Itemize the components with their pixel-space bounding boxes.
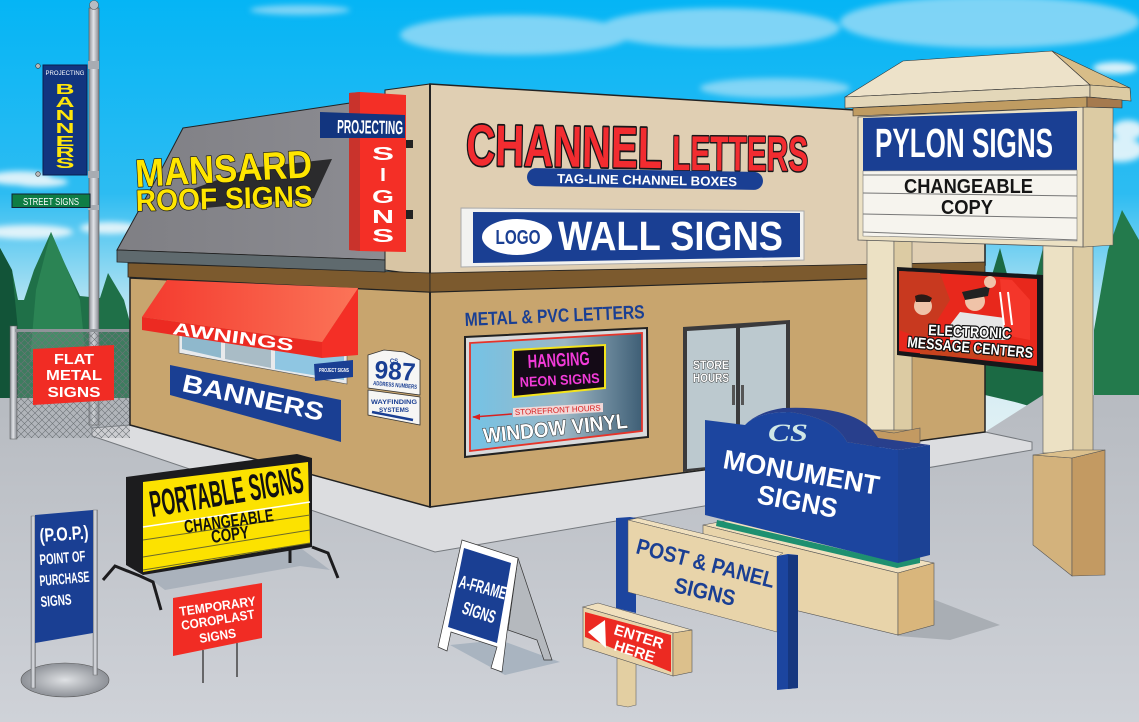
background trees right	[985, 210, 1139, 414]
store door	[683, 320, 790, 472]
mansard roof signs: ROOF SIGNS	[135, 180, 313, 218]
point of purchase sign: SIGNS	[40, 591, 72, 611]
address sign: ADDRESS NUMBERS	[373, 381, 417, 391]
background trees left	[0, 232, 132, 400]
pylon frame side	[1083, 107, 1113, 247]
projecting signs	[320, 92, 413, 252]
pylon left column	[867, 240, 912, 430]
projecting banner on pole: S	[56, 155, 74, 172]
hanging neon sign	[513, 345, 605, 397]
pylon roof cap	[845, 51, 1131, 116]
pylon left base	[873, 428, 920, 446]
wall signs: LOGO	[496, 227, 540, 249]
hanging neon sign: HANGING	[527, 349, 590, 373]
point of purchase sign	[21, 510, 109, 697]
pylon right column	[1043, 240, 1093, 453]
flat metal sign: METAL	[46, 367, 102, 384]
projecting banner on pole: A	[56, 94, 75, 111]
projecting banner on pole: R	[56, 144, 75, 161]
projecting signs: N	[372, 207, 394, 227]
channel letters: CHANNEL	[466, 113, 663, 181]
window with neon and vinyl signs: WINDOW VINYL	[482, 410, 629, 448]
monument sign: MONUMENT	[721, 444, 882, 501]
projecting banner on pole	[36, 64, 87, 176]
brown band left	[128, 263, 430, 292]
pylon changeable copy: CHANGEABLE	[904, 175, 1033, 198]
window with neon and vinyl signs	[465, 328, 648, 457]
street sign	[12, 194, 90, 208]
address sign: SYSTEMS	[379, 408, 409, 414]
pylon changeable copy	[863, 170, 1077, 241]
projecting banner on pole: B	[56, 81, 75, 98]
enter here sign: ENTER	[612, 622, 666, 653]
roof fascia	[117, 250, 385, 272]
projecting signs: I	[380, 165, 386, 185]
lower left wall	[130, 278, 430, 507]
banners: BANNERS	[180, 369, 326, 427]
electronic message center	[897, 267, 1043, 372]
street sign: STREET SIGNS	[23, 196, 79, 208]
corner line	[429, 84, 431, 507]
pylon blue panel	[863, 111, 1077, 171]
temporary coroplast sign	[173, 583, 262, 683]
left window under awning	[179, 330, 347, 384]
wall signs: WALL SIGNS	[558, 213, 783, 259]
projecting signs: S	[372, 226, 394, 246]
monument sign: CS	[768, 420, 808, 447]
monument sign shadow	[860, 600, 1000, 640]
projecting signs: PROJECTING	[337, 117, 403, 139]
hanging neon sign: NEON SIGNS	[519, 370, 600, 390]
tag-line channel box	[527, 168, 763, 190]
projecting signs: G	[372, 187, 394, 207]
corner return wall	[385, 84, 430, 276]
store door: STORE	[693, 358, 729, 372]
sky background	[0, 0, 1139, 430]
clouds	[0, 0, 1139, 239]
point of purchase sign: PURCHASE	[39, 569, 90, 590]
portable sign	[103, 454, 338, 610]
a-frame sign: SIGNS	[460, 598, 498, 627]
projecting signs: S	[372, 144, 394, 164]
awning	[142, 280, 358, 358]
small window hours sign: PROJECT SIGNS	[319, 368, 349, 374]
monument blue face	[705, 412, 898, 563]
mansard roof	[117, 100, 385, 260]
enter here sign	[583, 603, 692, 707]
address sign: CS	[390, 359, 398, 365]
flat metal sign: FLAT	[54, 351, 94, 368]
tag-line channel box: TAG-LINE CHANNEL BOXES	[557, 171, 738, 189]
pylon sign	[845, 51, 1131, 576]
enter here sign: HERE	[612, 638, 657, 666]
mansard roof signs: MANSARD	[134, 143, 313, 196]
monument blue side	[898, 445, 930, 563]
point of purchase sign: POINT OF	[39, 548, 86, 569]
wall signs	[461, 208, 804, 267]
upper right wall	[430, 84, 985, 276]
building	[117, 84, 985, 507]
sidewalk	[92, 425, 1032, 552]
monument green strip	[716, 520, 920, 568]
pylon right base	[1033, 450, 1105, 576]
address sign	[368, 350, 420, 425]
electronic message center: MESSAGE CENTERS	[907, 334, 1034, 362]
vinyl store hours strip: STOREFRONT HOURS	[515, 404, 601, 417]
post and panel sign	[616, 517, 798, 690]
monument blue top	[705, 408, 930, 450]
portable sign: COPY	[210, 522, 250, 547]
a-frame sign: A-FRAME	[457, 572, 509, 603]
mansard roof signs	[134, 143, 332, 218]
brown band right	[430, 262, 985, 292]
electronic message center: ELECTRONIC	[928, 322, 1012, 343]
address sign: 987	[374, 356, 416, 387]
awning: AWNINGS	[171, 319, 295, 355]
pylon frame	[858, 107, 1083, 247]
store door: HOURS	[693, 371, 729, 385]
projecting banner on pole: E	[56, 133, 74, 150]
post and panel sign: SIGNS	[672, 573, 738, 611]
post and panel sign: POST & PANEL	[634, 534, 778, 593]
projecting banner on pole: N	[56, 107, 74, 124]
ground	[0, 395, 1139, 722]
address sign: WAYFINDING	[371, 400, 417, 406]
metal and pvc letters: METAL & PVC LETTERS	[464, 302, 645, 331]
pylon changeable copy: COPY	[941, 196, 993, 219]
portable sign: PORTABLE SIGNS	[147, 459, 306, 525]
temporary coroplast sign: COROPLAST	[180, 607, 256, 633]
monument sign	[703, 408, 934, 635]
banners	[170, 365, 341, 442]
flat metal sign: SIGNS	[48, 384, 100, 401]
flat metal sign	[33, 345, 114, 405]
street pole	[88, 0, 99, 425]
chain-link fence	[10, 326, 130, 439]
projecting banner on pole: PROJECTING	[46, 70, 84, 77]
a-frame sign	[438, 540, 560, 675]
monument stone base	[703, 520, 934, 635]
vinyl store hours strip	[472, 403, 603, 420]
point of purchase sign: (P.O.P.)	[39, 523, 89, 547]
portable sign: CHANGEABLE	[183, 505, 275, 537]
projecting banner on pole: N	[56, 120, 74, 137]
temporary coroplast sign: SIGNS	[198, 625, 237, 646]
lower right wall	[430, 275, 985, 507]
small window hours sign	[314, 360, 353, 381]
channel letters: LETTERS	[672, 127, 808, 182]
temporary coroplast sign: TEMPORARY	[178, 593, 257, 619]
monument sign: SIGNS	[755, 479, 840, 524]
